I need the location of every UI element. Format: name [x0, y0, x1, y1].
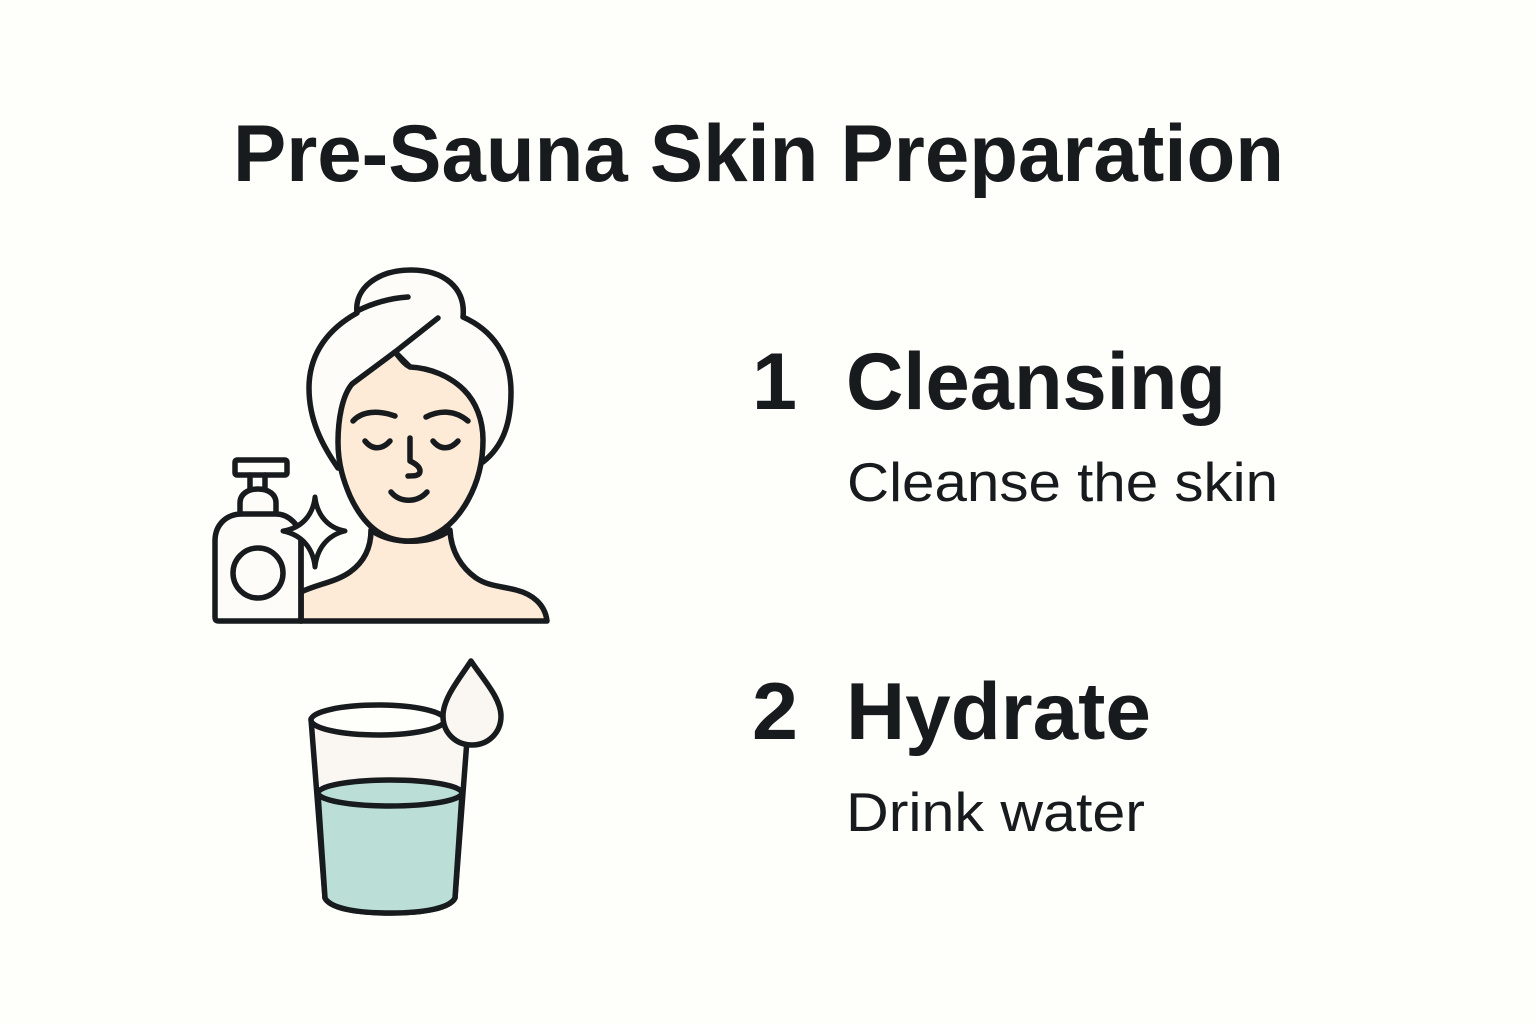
nose	[408, 438, 420, 476]
water	[318, 793, 462, 913]
water drop	[443, 661, 501, 745]
towel fold line	[395, 318, 438, 352]
step 2 heading: Hydrate	[846, 667, 1151, 757]
step 2 description: Drink water	[846, 781, 1145, 843]
sparkle	[283, 497, 345, 567]
bottle label	[233, 548, 283, 598]
bottle edge over sparkle	[298, 540, 304, 621]
title: Pre-Sauna Skin Preparation	[233, 109, 1284, 199]
eyebrows	[353, 412, 468, 421]
towel wrap	[309, 270, 511, 468]
step 2 number: 2	[752, 667, 798, 757]
icon: woman with towel and cleanser bottle	[215, 270, 547, 621]
glass body	[311, 719, 467, 913]
bottle body	[215, 514, 301, 621]
face	[338, 352, 483, 541]
bottle cap	[235, 460, 287, 475]
water surface	[318, 780, 462, 806]
step 1 description: Cleanse the skin	[847, 451, 1278, 513]
shoulders and neck	[301, 530, 547, 621]
step 1 number: 1	[752, 337, 797, 427]
towel bun fold	[357, 297, 408, 311]
glass rim	[311, 705, 445, 735]
smile	[391, 492, 427, 500]
bottle stem and pump	[240, 475, 276, 513]
icon: glass of water with drop	[311, 661, 501, 913]
closed eyes	[365, 441, 458, 448]
step 1 heading: Cleansing	[846, 337, 1226, 427]
